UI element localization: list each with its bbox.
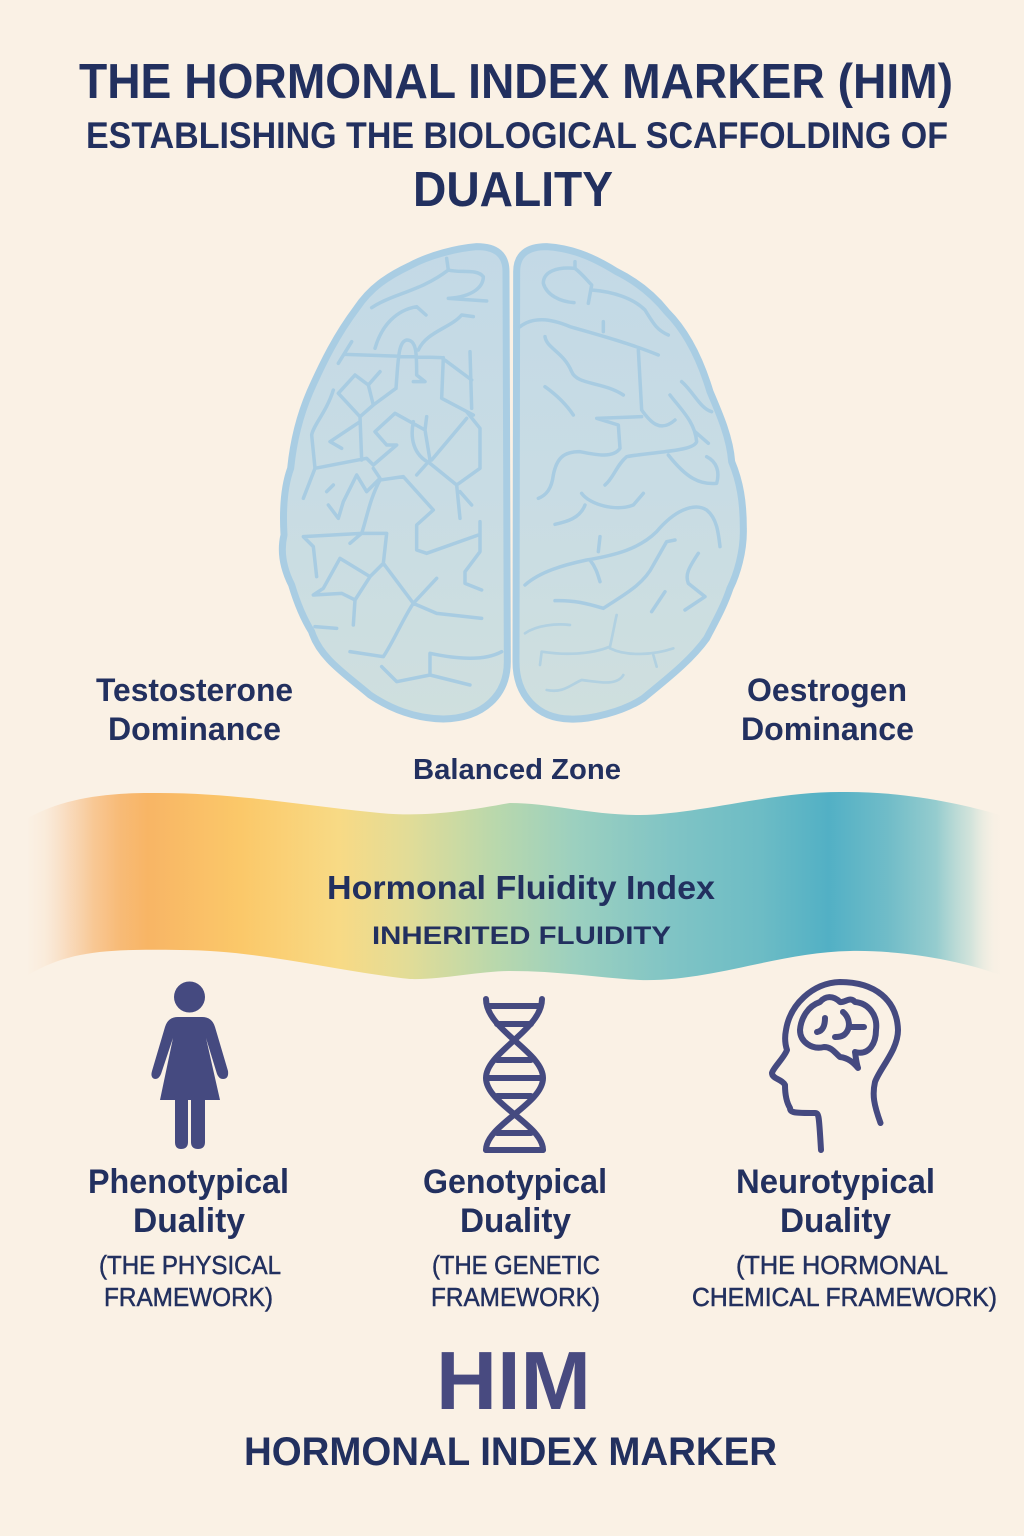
label: testosterone dominance: Testosterone [96,672,293,708]
footer acronym: HIM [436,1334,591,1427]
footer full name: HORMONAL INDEX MARKER [244,1430,777,1474]
label: oestrogen dominance: Dominance [741,711,914,747]
brain illustration [282,247,743,719]
left hemisphere [282,247,507,719]
icon: dna helix [486,999,543,1150]
column: phenotypical duality: Duality [133,1202,245,1240]
column: genotypical duality: Genotypical [423,1163,607,1201]
column: genotypical duality: Duality [460,1202,571,1240]
label: testosterone dominance: Dominance [108,711,281,747]
column: neurotypical duality: Duality [780,1202,891,1240]
column: genotypical duality [423,1163,607,1312]
column: neurotypical duality: (THE HORMONAL [736,1250,948,1280]
title line one: THE HORMONAL INDEX MARKER (HIM) [79,55,953,109]
column: neurotypical duality [692,1163,997,1312]
hormonal fluidity band [28,792,1000,980]
label: testosterone dominance [96,672,293,747]
column: genotypical duality: (THE GENETIC [432,1250,600,1280]
icon: woman figure [151,982,228,1149]
column: neurotypical duality: Neurotypical [736,1163,935,1201]
title block [79,55,953,217]
label: oestrogen dominance: Oestrogen [747,672,907,708]
band labels [327,869,716,950]
label: balanced zone: Balanced Zone [413,754,621,786]
column: genotypical duality: FRAMEWORK) [431,1282,600,1312]
column: phenotypical duality: Phenotypical [88,1163,289,1201]
band labels: Hormonal Fluidity Index [327,869,716,906]
subtitle line: ESTABLISHING THE BIOLOGICAL SCAFFOLDING OF [86,115,948,156]
label: oestrogen dominance [741,672,914,747]
keyword duality: DUALITY [413,163,613,217]
column: neurotypical duality: CHEMICAL FRAMEWORK) [692,1282,997,1312]
icon: head with brain [772,982,898,1150]
column: phenotypical duality: FRAMEWORK) [104,1282,273,1312]
band labels: INHERITED FLUIDITY [372,922,671,950]
column: phenotypical duality: (THE PHYSICAL [99,1250,281,1280]
right hemisphere [516,247,743,719]
column: phenotypical duality [88,1163,289,1312]
